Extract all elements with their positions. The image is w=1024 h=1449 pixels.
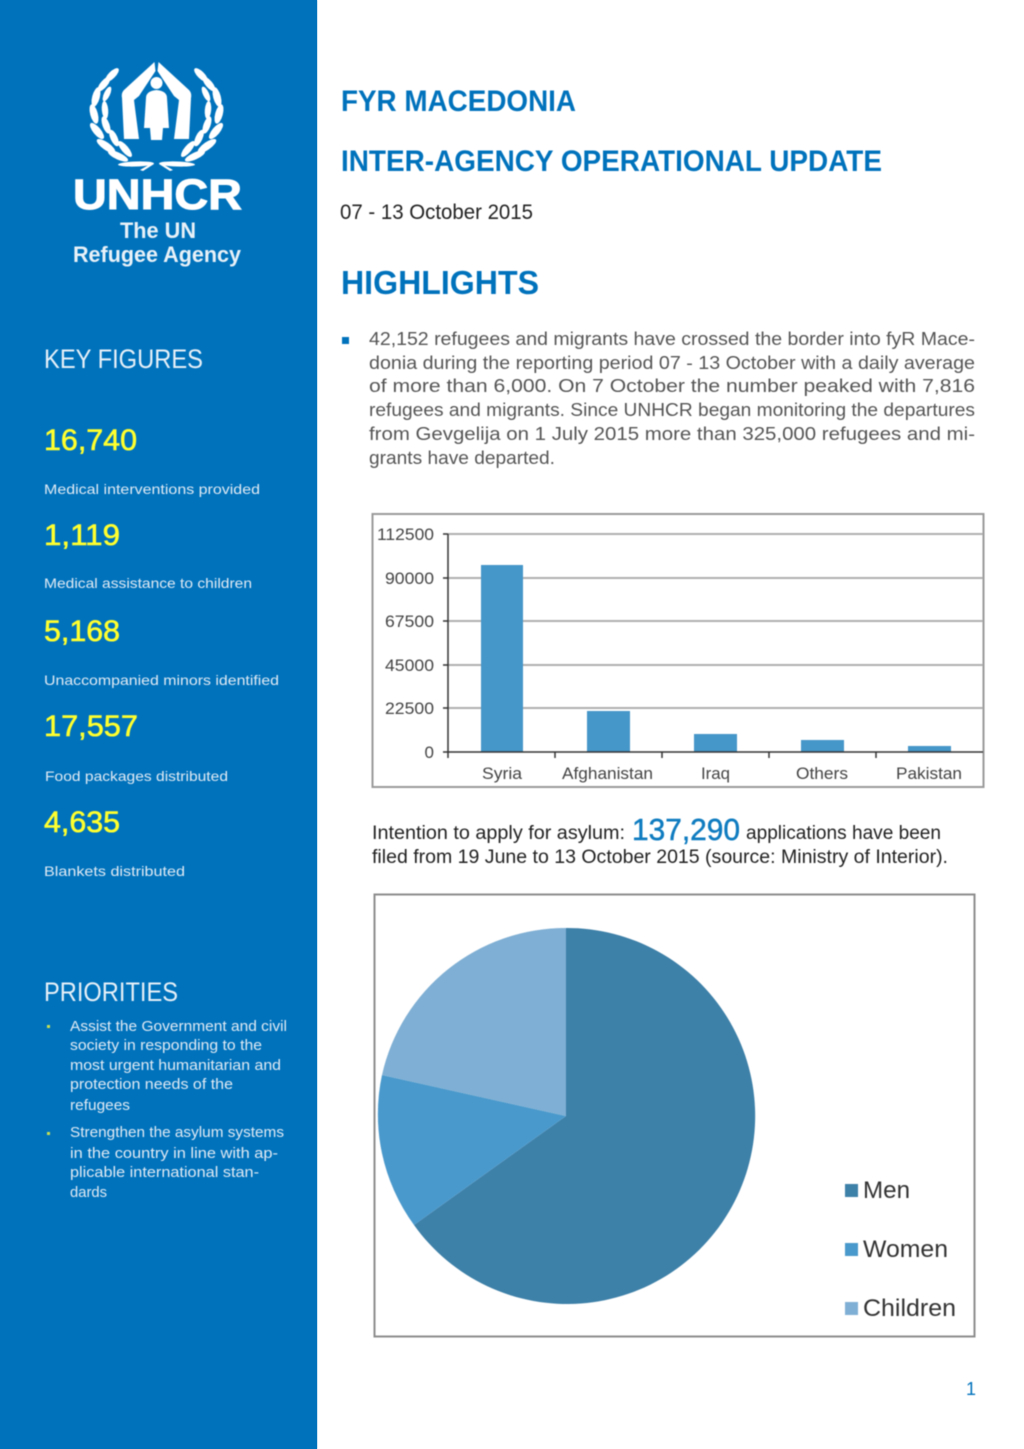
asylum applications text: 137,290: [632, 812, 740, 847]
figure: food packages: [44, 710, 228, 784]
figure: medical assistance to children: 1,119: [44, 519, 120, 552]
figure: unaccompanied minors: 5,168: [44, 615, 120, 648]
priority 1: Assist the Government and civil: [70, 1019, 287, 1035]
bar chart: arrivals by country: Pakistan: [896, 764, 962, 783]
priority 1: society in responding to the: [70, 1038, 262, 1054]
pie chart: men, women, children: [374, 894, 974, 1336]
priority 2: Strengthen the asylum systems: [70, 1125, 284, 1141]
highlights text block: 42,152 refugees and migrants have crossed the border into fyR Mace-: [369, 328, 975, 349]
bar chart: arrivals by country: 67500: [385, 612, 434, 631]
asylum applications text: applications have been: [746, 823, 941, 844]
bar chart: arrivals by country: 45000: [385, 656, 434, 675]
priority 2: plicable international stan-: [70, 1165, 259, 1181]
bar chart: arrivals by country: 0: [425, 743, 434, 762]
icon: UNHCR logo: [73, 62, 242, 267]
bar chart: arrivals by country: 22500: [385, 699, 434, 718]
legend: Men: [863, 1177, 910, 1204]
highlights text block: of more than 6,000. On 7 October the number peaked with 7,816: [369, 375, 975, 396]
figure: medical interventions: [44, 424, 260, 497]
heading: highlights: HIGHLIGHTS: [341, 264, 539, 301]
priority 1: [47, 1019, 287, 1114]
priority 2: in the country in line with ap-: [70, 1146, 278, 1162]
title: [341, 85, 882, 178]
figure: medical assistance to children: [44, 519, 252, 591]
priority 1: most urgent humanitarian and: [70, 1058, 281, 1074]
figure: blankets: [44, 806, 185, 879]
highlights text block: refugees and migrants. Since UNHCR began monitoring the departures: [369, 399, 975, 420]
figure: unaccompanied minors: [44, 615, 279, 688]
figure: blankets: 4,635: [44, 806, 120, 839]
icon: UNHCR logo: UNHCR: [73, 171, 242, 219]
slice: men: [414, 928, 755, 1304]
priority 2: [47, 1125, 284, 1201]
priority 1: refugees: [70, 1098, 130, 1114]
figure: medical assistance to children: Medical assistance to children: [44, 575, 252, 591]
icon: UNHCR logo: The UN: [120, 218, 196, 243]
bar chart: arrivals by country: [372, 514, 984, 787]
slice: children: [382, 928, 566, 1116]
figure: food packages: Food packages distributed: [45, 768, 228, 784]
asylum applications text: [372, 812, 948, 868]
title: INTER-AGENCY OPERATIONAL UPDATE: [341, 145, 882, 178]
priority 2: dards: [70, 1185, 107, 1201]
date: 07 - 13 October 2015: [340, 201, 533, 224]
priority 1: protection needs of the: [70, 1077, 233, 1093]
figure: medical interventions: 16,740: [44, 424, 137, 457]
bar chart: arrivals by country: Others: [796, 764, 848, 783]
bar chart: arrivals by country: Iraq: [701, 764, 730, 783]
bar chart: arrivals by country: Afghanistan: [562, 764, 653, 783]
highlights text block: donia during the reporting period 07 - 13 October with a daily average: [369, 352, 975, 373]
asylum applications text: Intention to apply for asylum:: [372, 823, 625, 844]
heading: key figures: KEY FIGURES: [44, 344, 203, 374]
figure: blankets: Blankets distributed: [44, 863, 185, 879]
slice: women: [378, 1075, 566, 1225]
heading: priorities: PRIORITIES: [44, 977, 178, 1007]
legend: Children: [863, 1295, 956, 1322]
legend: [845, 1177, 956, 1322]
highlights text block: from Gevgelija on 1 July 2015 more than 325,000 refugees and mi-: [369, 423, 975, 444]
bar chart: arrivals by country: Syria: [482, 764, 523, 783]
title: FYR MACEDONIA: [341, 85, 576, 118]
figure: food packages: 17,557: [44, 710, 138, 743]
panel: blue sidebar: [0, 0, 317, 1449]
highlights text block: grants have departed.: [369, 447, 555, 468]
figure: unaccompanied minors: Unaccompanied minors identified: [44, 672, 279, 688]
icon: UNHCR logo: Refugee Agency: [73, 242, 242, 267]
figure: medical interventions: Medical interventions provided: [44, 481, 260, 497]
legend: Women: [863, 1236, 948, 1263]
page number: 1: [966, 1379, 976, 1399]
highlights text block: [342, 328, 975, 468]
asylum applications text: filed from 19 June to 13 October 2015 (source: Ministry of Interior).: [372, 847, 948, 868]
bar chart: arrivals by country: 90000: [385, 569, 434, 588]
bar chart: arrivals by country: 112500: [377, 525, 434, 544]
